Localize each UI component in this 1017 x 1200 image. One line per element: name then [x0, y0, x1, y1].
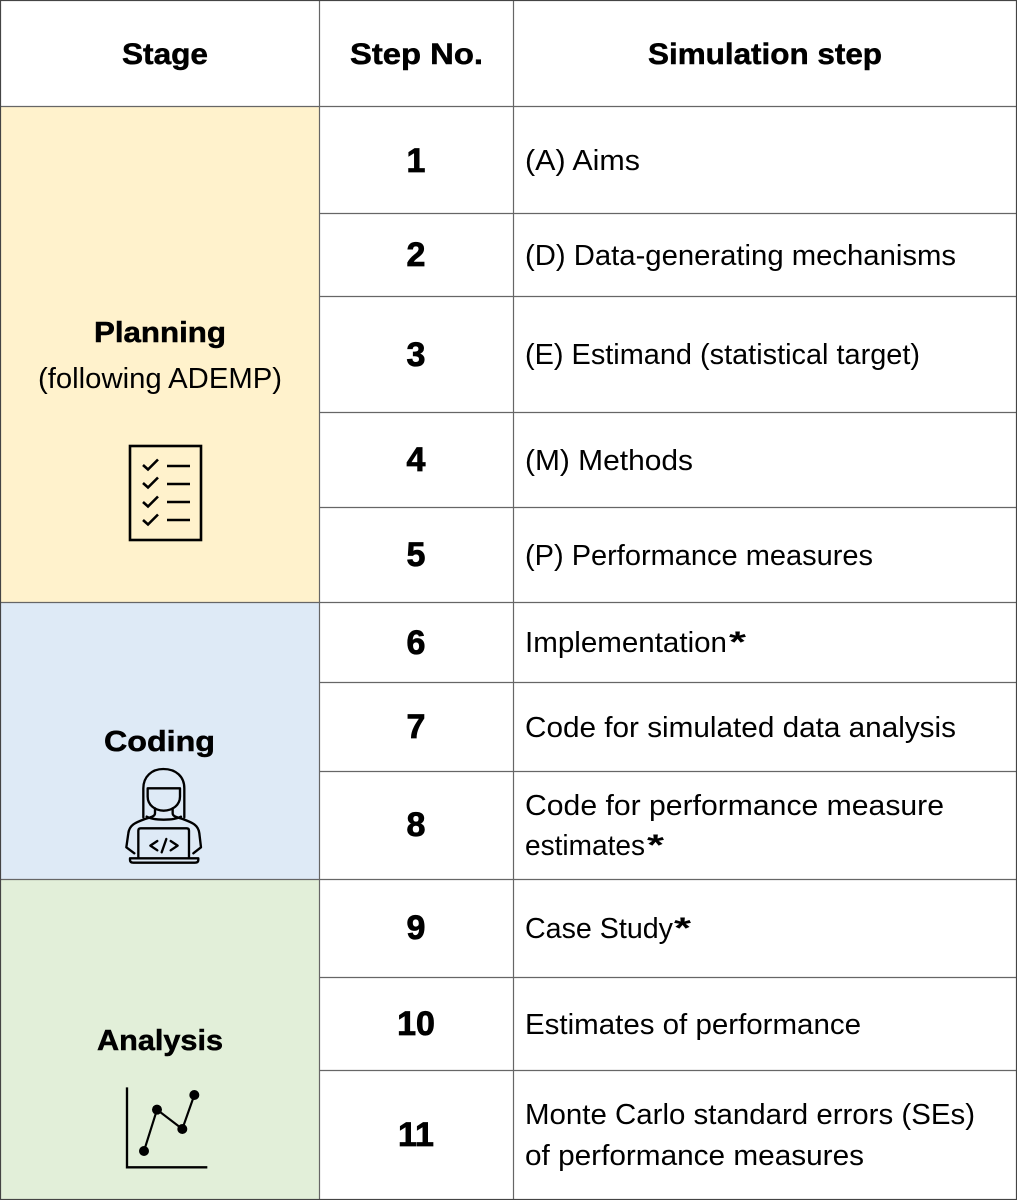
step number 7: 7 [407, 708, 425, 746]
step 8 text: estimates [525, 830, 645, 862]
text: Planning stage label: Planning [94, 317, 226, 349]
step 11 text [525, 1099, 975, 1172]
icon: line chart [127, 1087, 207, 1167]
text: Planning stage label: (following ADEMP) [38, 363, 282, 395]
text: Analysis stage label: Analysis [97, 1025, 223, 1057]
step 4 text: (M) Methods [525, 445, 693, 477]
step 9 text: Case Study [525, 913, 673, 945]
step number 9: 9 [407, 909, 425, 947]
panel: coding stage background [0, 602, 319, 879]
step number 8: 8 [407, 806, 425, 844]
step number 11: 11 [398, 1116, 434, 1154]
step number 4: 4 [407, 441, 426, 479]
step number 5: 5 [407, 536, 425, 574]
panel: planning stage background [0, 106, 319, 602]
text: Planning stage label [38, 317, 282, 395]
step number 6: 6 [407, 624, 425, 662]
step 7 text: Code for simulated data analysis [525, 712, 956, 744]
step number 10: 10 [397, 1005, 435, 1043]
step number 2: 2 [407, 236, 425, 274]
step 11 text: Monte Carlo standard errors (SEs) [525, 1099, 975, 1131]
step 8 text [525, 790, 944, 862]
step 1 text: (A) Aims [525, 145, 640, 177]
text: Coding stage label: Coding [104, 726, 215, 758]
panel: analysis stage background [0, 879, 319, 1199]
step 10 text: Estimates of performance [525, 1009, 861, 1041]
heading: Stage: Stage [122, 38, 208, 71]
heading: Step No.: Step No. [350, 38, 483, 71]
step 5 text: (P) Performance measures [525, 540, 873, 572]
icon: checklist [130, 446, 201, 540]
step number 3: 3 [407, 336, 425, 374]
step 6 text: Implementation [525, 627, 727, 659]
step 6 text: * [729, 626, 746, 659]
step 2 text: (D) Data-generating mechanisms [525, 240, 956, 272]
step 9 text: * [674, 912, 691, 945]
heading: Simulation step: Simulation step [648, 38, 882, 71]
step 8 text: * [647, 829, 664, 862]
step number 1: 1 [407, 142, 425, 180]
icon: person coding on laptop [126, 769, 201, 863]
step 3 text: (E) Estimand (statistical target) [525, 339, 920, 371]
step 8 text: Code for performance measure [525, 790, 944, 822]
step 11 text: of performance measures [525, 1140, 864, 1172]
